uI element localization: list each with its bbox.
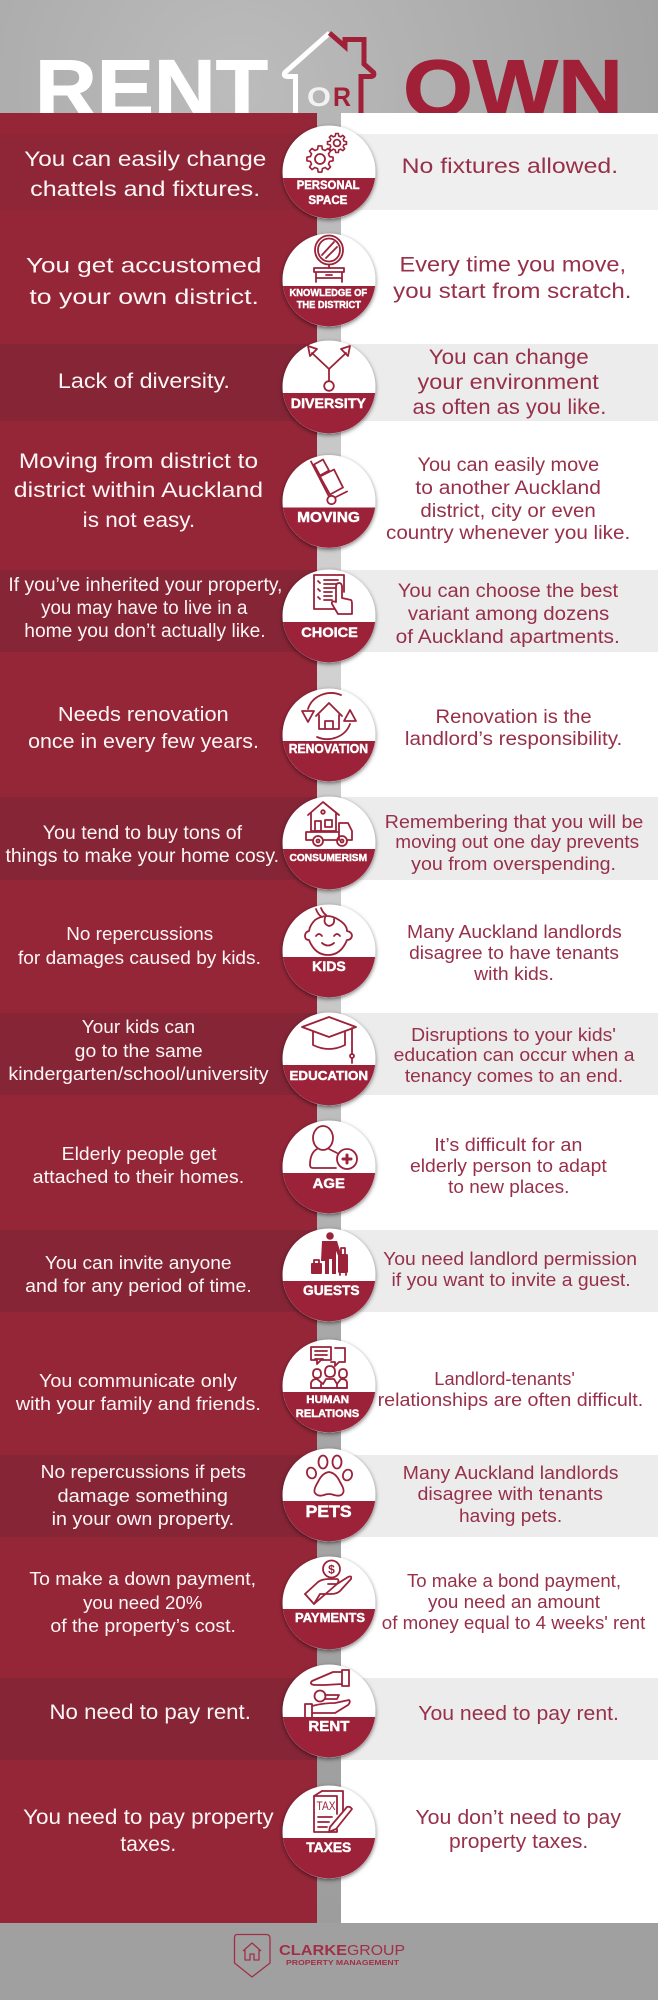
rent text: You tend to buy tons of — [43, 823, 243, 844]
rent text — [41, 1461, 246, 1529]
brand name: CLARKE — [279, 1943, 347, 1959]
badge disc — [282, 1556, 376, 1650]
rent text: Lack of diversity. — [58, 370, 230, 393]
rent text: To make a down payment, — [29, 1568, 256, 1589]
own text: to new places. — [448, 1177, 569, 1197]
own text: Many Auckland landlords — [407, 922, 622, 942]
row: payments — [29, 1556, 645, 1650]
word: OR: R — [333, 82, 351, 112]
rent text — [8, 1016, 269, 1084]
rent text: to your own district. — [29, 285, 259, 309]
icon: traveller with luggage — [311, 1232, 348, 1275]
own text — [407, 922, 622, 984]
own text: having pets. — [459, 1506, 562, 1526]
rent text: You communicate only — [39, 1370, 238, 1391]
row: moving — [14, 450, 630, 548]
rent text: district within Auckland — [14, 479, 263, 502]
rent text: with your family and friends. — [15, 1393, 261, 1414]
rent text — [23, 1806, 274, 1856]
icon: hands passing a key — [305, 1670, 350, 1718]
rent text: for damages caused by kids. — [18, 947, 261, 968]
badge label: CONSUMERISM — [290, 852, 367, 864]
icon: baby face — [305, 908, 352, 955]
own text: moving out one day prevents — [395, 832, 639, 852]
own text: Remembering that you will be — [385, 812, 643, 832]
rent text: taxes. — [120, 1833, 176, 1856]
own text: Every time you move, — [400, 254, 626, 276]
badge disc — [282, 234, 376, 326]
badge label — [290, 288, 367, 311]
row: personal space — [24, 126, 618, 218]
row: rent — [50, 1664, 619, 1758]
own text — [394, 1025, 636, 1086]
own text — [386, 455, 630, 544]
own text: if you want to invite a guest. — [392, 1270, 631, 1290]
own text: district, city or even — [420, 501, 596, 522]
icon: tax form and pen: TAX — [316, 1799, 336, 1813]
icon: tax form and pen — [314, 1791, 352, 1832]
footer logo — [234, 1934, 405, 1977]
own text: you start from scratch. — [393, 280, 632, 303]
icon: shield with house — [234, 1934, 270, 1977]
badge disc — [282, 1120, 376, 1214]
own text — [393, 254, 632, 303]
badge label — [297, 178, 360, 207]
rent text: you may have to live in a — [41, 598, 248, 619]
badge label: PERSONAL — [297, 178, 360, 192]
badge disc — [282, 1340, 376, 1432]
rent text: and for any period of time. — [25, 1275, 252, 1296]
own text: It’s difficult for an — [434, 1135, 582, 1155]
own text — [410, 1135, 607, 1197]
brand name second part: GROUP — [347, 1943, 405, 1959]
rent text — [28, 704, 259, 753]
rent text: Elderly people get — [62, 1143, 217, 1164]
rent text: You can easily change — [24, 148, 266, 171]
own text — [378, 1369, 643, 1410]
rent text — [33, 1143, 244, 1187]
own text — [403, 1463, 618, 1526]
own text — [396, 581, 620, 648]
rent text: once in every few years. — [28, 731, 259, 753]
rent text: things to make your home cosy. — [6, 846, 279, 867]
rent text: of the property’s cost. — [50, 1615, 236, 1636]
badge disc — [282, 455, 376, 548]
title word: OWN: OWN — [403, 44, 623, 134]
row: consumerism — [6, 796, 643, 890]
icon: mirror and table — [314, 236, 344, 282]
rent text — [15, 1370, 261, 1414]
icon: graduation cap — [302, 1017, 356, 1063]
badge disc — [282, 796, 376, 890]
title word: RENT: RENT — [35, 44, 268, 134]
centre strip — [316, 113, 342, 1923]
own text: landlord’s responsibility. — [405, 729, 622, 750]
own text: property taxes. — [449, 1831, 588, 1853]
badge label: MOVING — [297, 509, 360, 526]
own text: country whenever you like. — [386, 523, 630, 544]
row: kids — [18, 904, 622, 998]
rent text: No repercussions if pets — [41, 1461, 246, 1482]
title — [40, 31, 618, 113]
badge label: KNOWLEDGE OF — [290, 288, 367, 299]
rent text — [24, 148, 266, 201]
word: OR: O — [307, 82, 331, 112]
own text: to another Auckland — [415, 478, 601, 499]
rent column background — [0, 113, 317, 1923]
own text: education can occur when a — [394, 1045, 636, 1065]
own text — [383, 1249, 637, 1290]
rent text: If you’ve inherited your property, — [8, 575, 282, 596]
rent text: You need to pay property — [23, 1806, 274, 1829]
rent text: attached to their homes. — [33, 1166, 244, 1187]
rent text: damage something — [58, 1485, 228, 1506]
own text — [385, 812, 643, 874]
rent text: in your own property. — [52, 1508, 234, 1529]
own text: Disruptions to your kids' — [411, 1025, 616, 1045]
own text: You can change — [429, 346, 589, 369]
badge disc — [282, 1448, 376, 1542]
icon: paw print — [305, 1456, 354, 1496]
badge label: KIDS — [312, 958, 346, 974]
rent text: chattels and fixtures. — [30, 178, 260, 201]
own text: Landlord-tenants' — [434, 1369, 575, 1389]
badge label: RENT — [308, 1718, 350, 1735]
badge label — [296, 1394, 359, 1420]
icon: coin over hand — [305, 1560, 351, 1604]
row: human relations — [15, 1340, 643, 1432]
row: guests — [25, 1228, 637, 1322]
icon: coin over hand: $ — [328, 1562, 335, 1576]
own text: your environment — [418, 371, 599, 394]
rent text — [8, 575, 282, 642]
own text: disagree to have tenants — [409, 943, 619, 963]
rent text: go to the same — [75, 1040, 203, 1061]
own text: You can easily move — [418, 455, 599, 476]
rent text: You can invite anyone — [45, 1252, 232, 1273]
badge label: PETS — [306, 1502, 352, 1521]
badge disc — [282, 1012, 376, 1106]
rent text: you need 20% — [83, 1592, 202, 1613]
rent text: kindergarten/school/university — [8, 1063, 269, 1084]
rent text: is not easy. — [83, 509, 195, 532]
row: renovation — [28, 688, 622, 782]
badge disc — [282, 570, 376, 662]
row: knowledge of the district — [26, 234, 632, 326]
row: diversity — [58, 340, 606, 434]
row: taxes — [23, 1786, 621, 1878]
icon: house outline white half — [284, 33, 330, 113]
rent text — [26, 254, 261, 309]
row: choice — [8, 570, 620, 662]
rent text: Your kids can — [82, 1016, 195, 1037]
badge label: RENOVATION — [289, 742, 368, 756]
icon: house on a truck — [306, 802, 352, 846]
badge label: PAYMENTS — [295, 1610, 365, 1625]
row: age — [33, 1120, 607, 1214]
own text — [382, 1571, 645, 1633]
own text: as often as you like. — [412, 396, 606, 419]
badge label: TAXES — [306, 1839, 351, 1855]
own text: elderly person to adapt — [410, 1156, 607, 1176]
rent text — [14, 450, 263, 532]
badge disc — [282, 688, 376, 782]
row: pets — [41, 1448, 618, 1542]
icon: hand truck — [311, 460, 347, 504]
own text: with kids. — [473, 964, 554, 984]
own text: of money equal to 4 weeks' rent — [382, 1613, 645, 1633]
own text: You need landlord permission — [383, 1249, 637, 1269]
icon: diverging arrows — [308, 346, 350, 391]
icon: house outline red half — [330, 33, 374, 113]
own text: variant among dozens — [408, 604, 609, 625]
own text: You don’t need to pay — [415, 1807, 621, 1829]
rent text: home you don’t actually like. — [24, 621, 266, 642]
badge disc — [282, 1228, 376, 1322]
rent text — [6, 823, 279, 867]
icon: gears — [307, 133, 347, 172]
badge disc — [282, 126, 376, 218]
rent text — [25, 1252, 252, 1296]
badge label: RELATIONS — [296, 1408, 359, 1420]
badge label: SPACE — [308, 193, 347, 207]
rent text: No need to pay rent. — [50, 1701, 251, 1724]
badge disc — [282, 340, 376, 434]
rent text — [18, 923, 261, 968]
own text: relationships are often difficult. — [378, 1390, 643, 1410]
badge label: THE DISTRICT — [297, 300, 361, 311]
own text: Renovation is the — [436, 707, 592, 728]
own text: you need an amount — [428, 1592, 600, 1612]
badge label: EDUCATION — [290, 1068, 368, 1083]
tagline: PROPERTY MANAGEMENT — [286, 1958, 399, 1967]
rent text: Needs renovation — [58, 704, 229, 726]
rent text — [29, 1568, 256, 1636]
badge label: GUESTS — [303, 1282, 360, 1298]
rent text: No repercussions — [66, 923, 213, 944]
own text: Many Auckland landlords — [403, 1463, 618, 1483]
own text — [412, 346, 606, 419]
own text: No fixtures allowed. — [402, 155, 618, 178]
icon: checklist with pointing hand — [314, 575, 352, 614]
own text — [415, 1807, 621, 1853]
icon: house with cycle arrows — [302, 693, 356, 739]
row: education — [8, 1012, 636, 1106]
icon: people talking — [311, 1347, 347, 1388]
word: OR — [308, 87, 350, 106]
own column background — [341, 113, 658, 1923]
badge disc — [282, 1664, 376, 1758]
footer background — [0, 1923, 658, 2000]
own text: tenancy comes to an end. — [405, 1066, 623, 1086]
own text: You can choose the best — [398, 581, 619, 602]
own text: You need to pay rent. — [418, 1703, 619, 1725]
rent text: Moving from district to — [19, 450, 258, 473]
badge label: HUMAN — [306, 1394, 349, 1406]
rent text: You get accustomed — [26, 254, 261, 278]
own text: To make a bond payment, — [407, 1571, 621, 1591]
badge label: CHOICE — [301, 624, 358, 640]
header background — [0, 0, 658, 113]
icon: person with plus — [310, 1126, 357, 1169]
own text: you from overspending. — [411, 854, 616, 874]
badge label: AGE — [313, 1175, 345, 1191]
own text: disagree with tenants — [418, 1484, 603, 1504]
own text — [405, 707, 622, 750]
own text: of Auckland apartments. — [396, 627, 620, 648]
badge label: DIVERSITY — [291, 395, 367, 411]
badge disc — [282, 904, 376, 998]
badge disc — [282, 1786, 376, 1878]
